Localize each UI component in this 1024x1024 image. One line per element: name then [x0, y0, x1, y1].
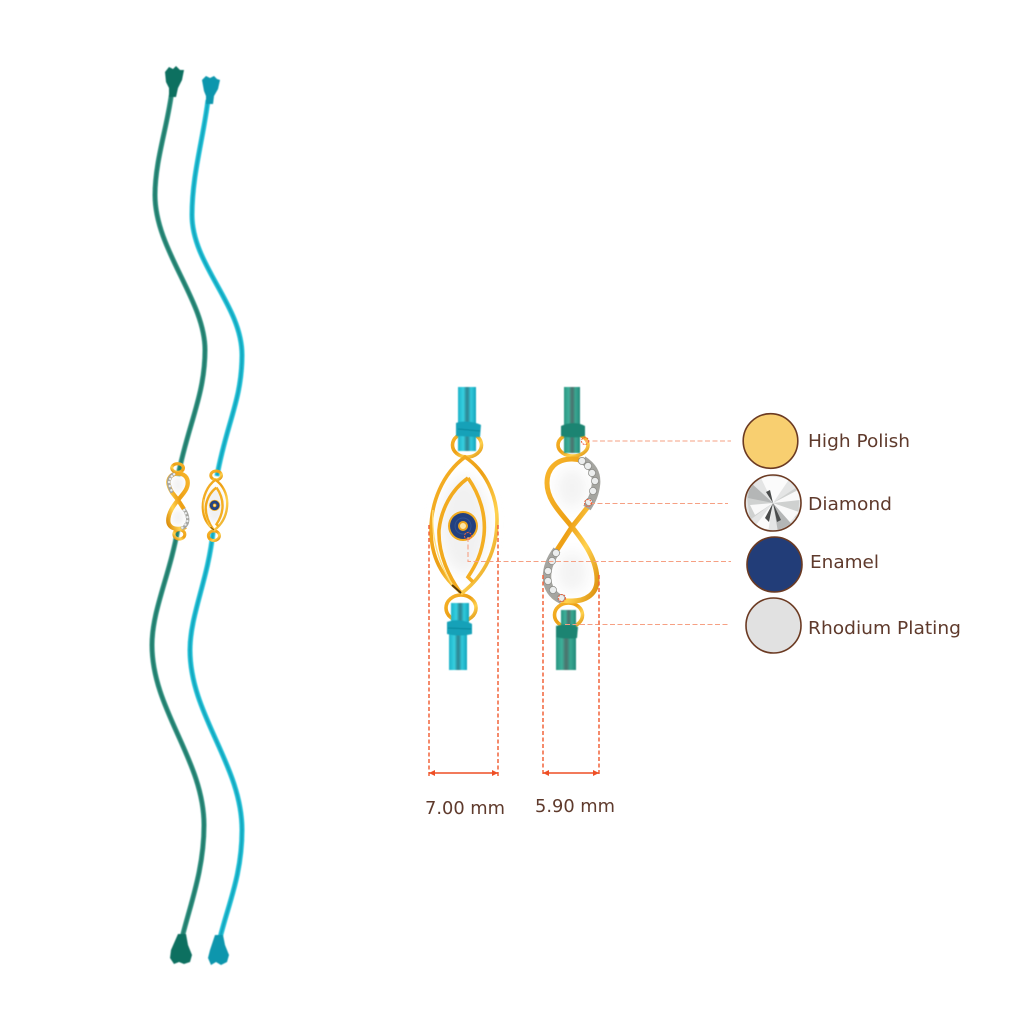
full rakhi: blue cord [190, 76, 242, 965]
legend: high polish [743, 414, 910, 468]
dimension: 7.00 mm width [425, 525, 505, 819]
cord: upper green [561, 387, 585, 453]
cord: upper blue [456, 387, 481, 451]
leader lines [468, 441, 731, 624]
cord: lower green [556, 610, 578, 670]
legend: diamond: Diamond [808, 494, 892, 515]
legend: rhodium plating [746, 598, 961, 653]
detail: infinity pendant [544, 387, 599, 670]
legend: high polish: High Polish [808, 431, 910, 452]
dimension: 5.90 mm width [535, 575, 615, 817]
leader markers [464, 438, 592, 602]
legend: enamel [747, 537, 879, 592]
full rakhi: green cord [152, 66, 205, 964]
dimension: 7.00 mm width: 7.00 mm [425, 798, 505, 819]
small infinity pendant on green rakhi [168, 464, 189, 539]
legend: enamel: Enamel [810, 552, 879, 573]
legend: diamond [745, 475, 892, 532]
cord: lower blue [447, 603, 472, 670]
small evil eye pendant on blue rakhi [203, 471, 227, 541]
pendant artwork [544, 434, 599, 627]
pendant artwork [431, 433, 497, 621]
detail: evil eye pendant [431, 387, 497, 670]
legend: rhodium plating: Rhodium Plating [808, 618, 961, 639]
dimension: 5.90 mm width: 5.90 mm [535, 796, 615, 817]
